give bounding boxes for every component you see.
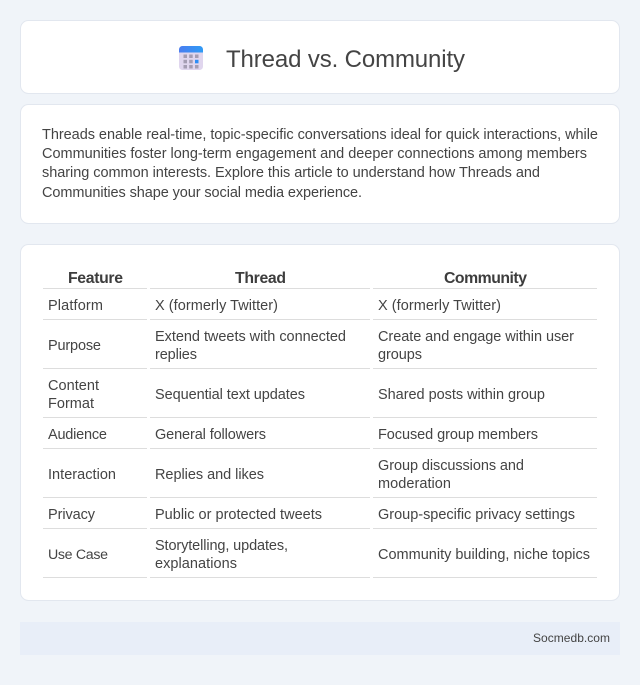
row: platform: X (formerly Twitter): [155, 298, 278, 314]
title: Thread vs. Community: [226, 46, 465, 73]
row: use case: Community building, niche topics: [378, 547, 590, 563]
icon: calendar: [179, 46, 203, 70]
row: purpose: Purpose: [48, 338, 101, 354]
row: use case: Storytelling, updates,: [155, 538, 288, 554]
footer: [20, 622, 620, 655]
table header row: Thread: [235, 270, 286, 287]
row: content format: Sequential text updates: [155, 387, 305, 403]
row: use case: explanations: [155, 556, 237, 572]
text block: introduction: sharing common interests. Explore this article to understand how Threads and: [42, 165, 540, 181]
row: platform: [48, 298, 501, 314]
row: purpose: [48, 329, 574, 363]
row: purpose: replies: [155, 347, 197, 363]
row: interaction: Replies and likes: [155, 467, 264, 483]
row: interaction: Group discussions and: [378, 458, 524, 474]
row: purpose: Extend tweets with connected: [155, 329, 346, 345]
footer source text: Socmedb.com: [533, 631, 610, 645]
row: audience: [48, 427, 538, 443]
panel: introduction: [20, 104, 620, 224]
row: use case: Use Case: [48, 547, 108, 563]
row: content format: Shared posts within group: [378, 387, 545, 403]
row: content format: Content: [48, 378, 99, 394]
row: purpose: Create and engage within user: [378, 329, 574, 345]
text block: introduction: Communities foster long-term engagement and deeper connections among members: [42, 146, 587, 162]
row: privacy: [48, 507, 575, 523]
row: platform: Platform: [48, 298, 103, 314]
row: content format: Format: [48, 396, 94, 412]
row: privacy: Public or protected tweets: [155, 507, 322, 523]
table header row: Feature: [68, 270, 123, 287]
table header row: Community: [444, 270, 527, 287]
table header row: [68, 270, 527, 287]
row: privacy: Privacy: [48, 507, 96, 523]
panel: comparison table: [20, 244, 620, 600]
row: platform: X (formerly Twitter): [378, 298, 501, 314]
row: interaction: Interaction: [48, 467, 116, 483]
text block: introduction: [42, 127, 598, 201]
row: privacy: Group-specific privacy settings: [378, 507, 575, 523]
row: content format: [48, 378, 545, 412]
panel: header: [20, 20, 620, 94]
row: interaction: moderation: [378, 476, 451, 492]
text block: introduction: Communities shape your social media experience.: [42, 185, 362, 201]
row: audience: Audience: [48, 427, 107, 443]
text block: introduction: Threads enable real-time, topic-specific conversations ideal for quick interactions, while: [42, 127, 598, 143]
row: audience: General followers: [155, 427, 266, 443]
row: interaction: [48, 458, 524, 492]
row: purpose: groups: [378, 347, 422, 363]
row: audience: Focused group members: [378, 427, 538, 443]
row: use case: [48, 538, 590, 572]
